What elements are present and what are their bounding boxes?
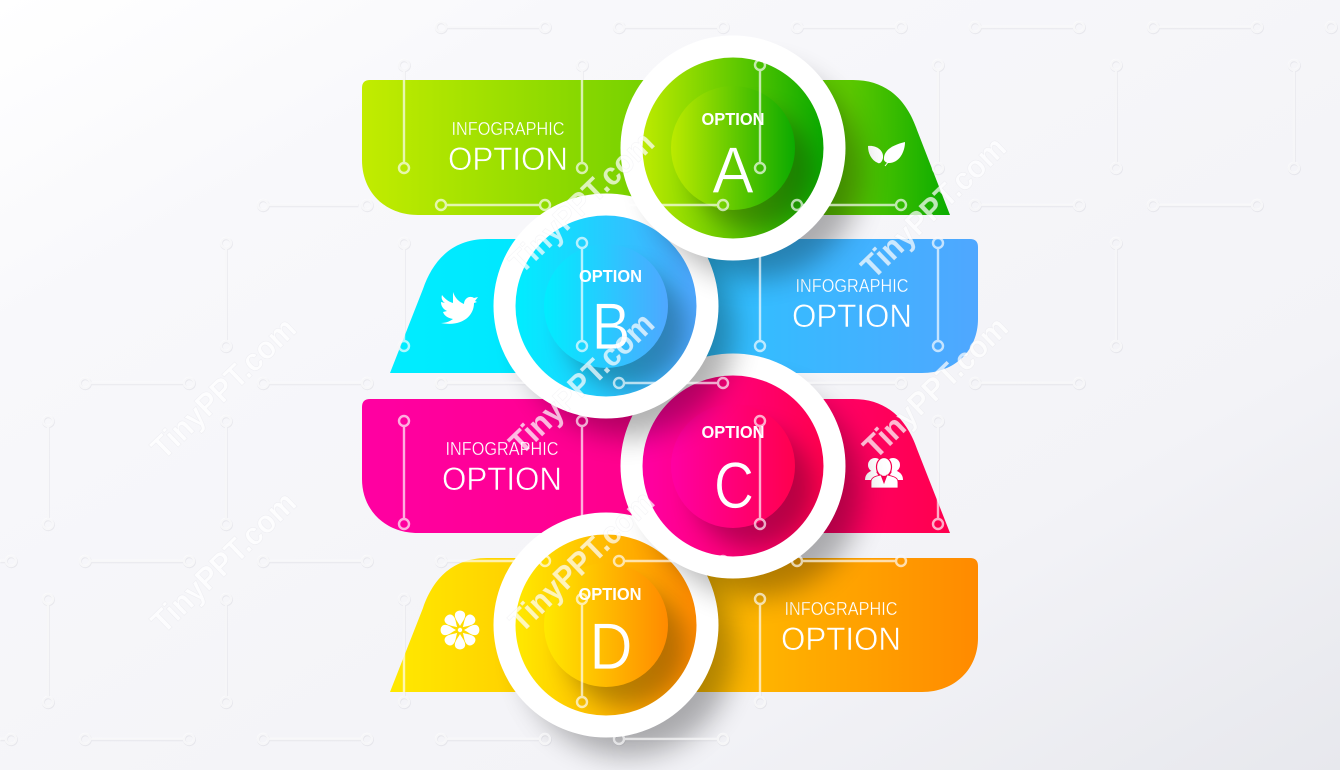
watermarks: TinyPPT.com bbox=[144, 310, 303, 466]
band A text: INFOGRAPHIC bbox=[452, 118, 564, 139]
band D text bbox=[781, 598, 901, 657]
band A bbox=[362, 80, 950, 215]
band D text: INFOGRAPHIC bbox=[784, 598, 898, 619]
circle D: OPTION bbox=[578, 584, 642, 604]
watermarks: TinyPPT.com bbox=[144, 484, 303, 640]
circle B: OPTION bbox=[579, 266, 642, 286]
band B bbox=[390, 239, 978, 373]
band D text: OPTION bbox=[781, 621, 901, 657]
circle A: A bbox=[712, 133, 754, 207]
icon: group of people bbox=[865, 458, 903, 488]
band B text: INFOGRAPHIC bbox=[796, 275, 908, 296]
circle D bbox=[494, 512, 734, 756]
watermarks: TinyPPT.com bbox=[854, 129, 1013, 285]
band C text: OPTION bbox=[442, 461, 562, 497]
watermarks bbox=[144, 124, 1015, 640]
circle D: D bbox=[590, 609, 632, 683]
watermarks: TinyPPT.com bbox=[502, 124, 661, 280]
band D bbox=[390, 558, 978, 692]
circle A: OPTION bbox=[702, 109, 764, 129]
icon: twitter bird bbox=[441, 292, 478, 324]
icon: flower bbox=[441, 611, 479, 649]
band C bbox=[362, 399, 950, 533]
circle C bbox=[620, 354, 861, 597]
band B text bbox=[792, 275, 912, 334]
watermarks: TinyPPT.com bbox=[502, 305, 661, 461]
band C text bbox=[442, 438, 562, 497]
band A text: OPTION bbox=[448, 141, 568, 177]
band B text: OPTION bbox=[792, 298, 912, 334]
circle A bbox=[620, 36, 861, 279]
band A text bbox=[448, 118, 568, 177]
circle B: B bbox=[592, 289, 630, 363]
icon: leaves bbox=[868, 142, 905, 166]
circle C: C bbox=[714, 448, 754, 522]
watermarks: TinyPPT.com bbox=[856, 309, 1015, 465]
watermarks: TinyPPT.com bbox=[502, 483, 661, 639]
band C text: INFOGRAPHIC bbox=[446, 438, 558, 459]
circle B bbox=[494, 194, 734, 437]
circle C: OPTION bbox=[702, 422, 764, 442]
